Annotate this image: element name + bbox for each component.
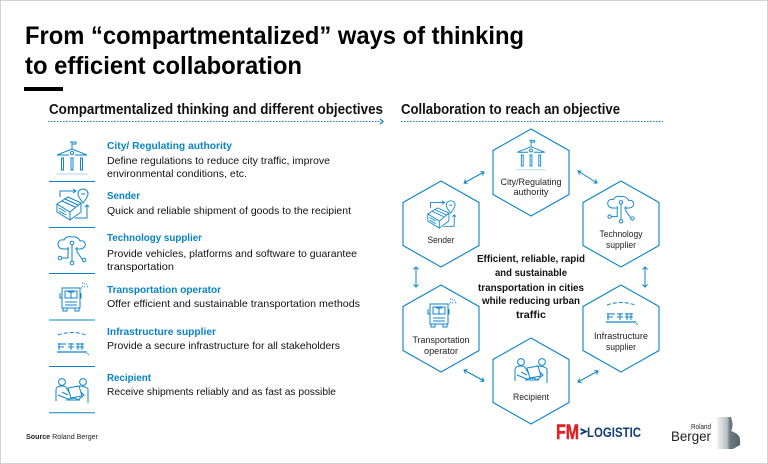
hexagon: recipient — [493, 338, 569, 424]
hexagon: technology supplier: supplier — [606, 240, 636, 251]
hexagon: technology supplier: Technology — [600, 229, 643, 240]
center objective text: and sustainable — [495, 267, 567, 279]
text: sender: Sender — [107, 190, 140, 202]
arrow: city to technology — [578, 171, 597, 183]
icon: connected bus — [60, 283, 88, 311]
title: From “compartmentalized” ways of thinking — [25, 22, 524, 50]
text: infrastructure supplier: Infrastructure supplier — [107, 326, 216, 338]
hexagon: infrastructure supplier: Infrastructure — [594, 331, 648, 342]
heading: collaboration: Collaboration to reach an objective — [401, 102, 620, 118]
title rule — [24, 87, 63, 91]
icon: parcel and pin — [57, 189, 89, 220]
logo: Roland Berger: Berger — [671, 428, 711, 444]
row: transportation operator — [60, 283, 360, 311]
row: infrastructure supplier — [57, 326, 340, 355]
heading: compartmentalized thinking: Compartmentalized thinking and different objectives — [49, 102, 383, 118]
text: technology supplier: transportation — [107, 261, 174, 273]
title — [25, 22, 524, 80]
text: transportation operator — [107, 284, 360, 310]
logo: Roland Berger — [671, 417, 740, 449]
text: transportation operator: Offer efficient and sustainable transportation methods — [107, 298, 360, 310]
logo: FM Logistic: LOGISTIC — [587, 425, 641, 440]
hexagon: city authority — [493, 129, 569, 216]
text: city authority: City/ Regulating authority — [107, 140, 232, 152]
row: city authority — [56, 140, 330, 180]
text: city authority: environmental conditions, etc. — [107, 168, 247, 180]
row: recipient — [56, 372, 336, 403]
panel: collaboration — [401, 102, 663, 424]
text: recipient — [107, 372, 336, 398]
hexagon: transportation operator — [403, 285, 479, 372]
arrow: sender to transportation — [414, 267, 418, 287]
source note: Source Roland Berger — [26, 434, 99, 441]
text: technology supplier — [107, 232, 357, 273]
hexagon: transportation operator: Transportation — [412, 335, 470, 346]
icon: infrastructure — [57, 332, 89, 355]
center objective text: transportation in cities — [478, 282, 584, 294]
text: technology supplier: Provide vehicles, platforms and software to guarantee — [107, 248, 357, 260]
text: sender: Quick and reliable shipment of goods to the recipient — [107, 205, 351, 217]
row: technology supplier — [58, 232, 357, 273]
text: city authority — [107, 140, 330, 180]
arrow: sender to city — [464, 172, 484, 184]
hexagon: transportation operator: operator — [424, 346, 458, 357]
text: sender — [107, 190, 351, 217]
hexagon: infrastructure supplier — [583, 285, 659, 372]
hexagon: sender — [403, 181, 479, 267]
row: sender — [57, 189, 351, 220]
text: city authority: Define regulations to reduce city traffic, improve — [107, 155, 330, 167]
logo: FM Logistic — [556, 421, 641, 444]
hexagon: city authority: authority — [514, 187, 549, 198]
hexagon: infrastructure supplier: supplier — [606, 342, 636, 353]
logo: Roland Berger: Roland — [691, 422, 711, 431]
hexagon: sender: Sender — [428, 235, 454, 246]
center objective text: Efficient, reliable, rapid — [477, 253, 585, 265]
center objective text: traffic — [516, 309, 546, 321]
text: recipient: Recipient — [107, 372, 151, 384]
icon: two people with laptop — [56, 379, 88, 403]
hexagon: technology supplier — [583, 181, 659, 267]
text: infrastructure supplier: Provide a secure infrastructure for all stakeholders — [107, 340, 340, 352]
title: to efficient collaboration — [25, 52, 302, 80]
icon: cloud network — [58, 237, 86, 265]
hexagon: city authority: City/Regulating — [500, 177, 562, 188]
arrow: technology to infrastructure — [642, 267, 648, 287]
arrow: infrastructure to recipient — [578, 370, 598, 382]
center objective text: while reducing urban — [481, 295, 580, 307]
text: transportation operator: Transportation operator — [107, 284, 221, 296]
icon: city building — [56, 142, 88, 174]
panel: compartmentalized thinking — [48, 102, 383, 413]
arrow: transportation to recipient — [464, 370, 484, 382]
center objective text — [477, 253, 585, 321]
dotted arrow — [48, 119, 383, 124]
text: infrastructure supplier — [107, 326, 340, 352]
text: technology supplier: Technology supplier — [107, 232, 202, 244]
text: recipient: Receive shipments reliably and as fast as possible — [107, 386, 336, 398]
logo: FM Logistic: FM — [556, 421, 579, 444]
hexagon: recipient: Recipient — [513, 392, 549, 403]
